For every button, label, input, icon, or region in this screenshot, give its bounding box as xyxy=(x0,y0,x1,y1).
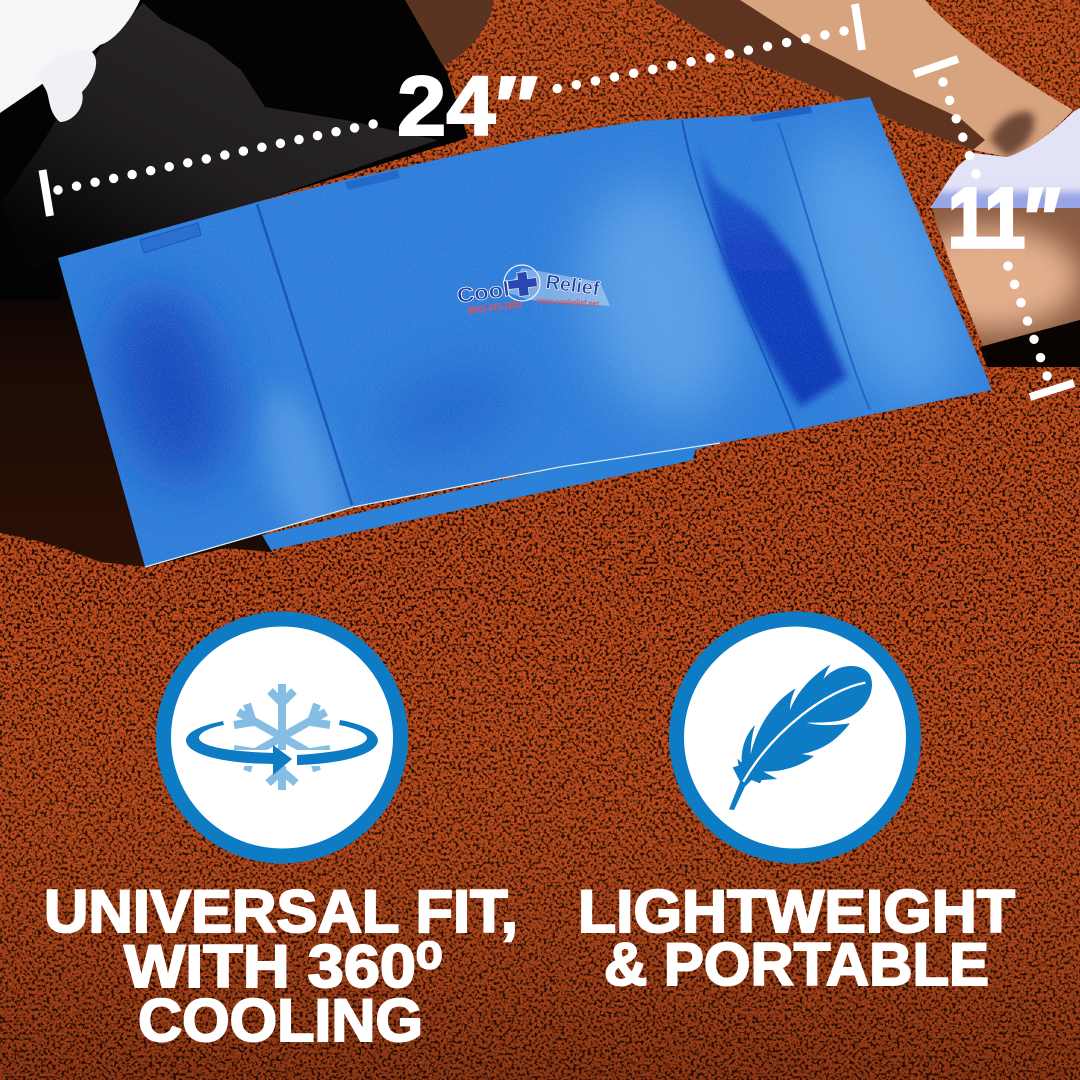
shadow under pack and athlete xyxy=(0,258,146,567)
11 inch bottom dotted line xyxy=(1008,266,1047,376)
pack deep fold shadow, right panel xyxy=(690,133,847,407)
logo swoosh xyxy=(505,268,610,306)
caption: lightweight and portable: LIGHTWEIGHT xyxy=(578,878,1015,945)
pack fabric texture xyxy=(50,90,1000,570)
right leg shaded underside xyxy=(653,0,985,150)
pack light patches xyxy=(243,111,995,561)
caption: universal fit: WITH 360⁰ xyxy=(124,933,442,1000)
logo phone number: (800) 475-1609 xyxy=(467,299,522,317)
pack tab: right xyxy=(750,105,812,122)
icon: rotation ring with arrow xyxy=(186,720,378,775)
shadow sliver between pack and flap xyxy=(150,532,272,566)
athlete lower leg xyxy=(932,208,1080,346)
logo cross xyxy=(507,271,538,298)
11 inch top tick xyxy=(914,59,958,74)
right leg knee hollow shadow xyxy=(990,112,1034,157)
caption: universal fit: COOLING xyxy=(138,987,423,1054)
dimension: 11 inch height xyxy=(914,59,1074,397)
dimension: 24 inch width xyxy=(42,4,862,216)
caption: lightweight and portable xyxy=(578,878,1015,998)
24 inch right dotted line xyxy=(556,31,844,89)
pack seam: right xyxy=(682,120,795,430)
11 inch top dotted line xyxy=(943,82,976,174)
caption: universal fit: UNIVERSAL FIT, xyxy=(44,878,518,945)
icon: feather xyxy=(729,664,872,810)
leg shadow on track xyxy=(980,320,1080,367)
athlete black shorts xyxy=(0,0,468,300)
pack stitched bottom edge xyxy=(145,443,720,567)
caption: lightweight and portable: & PORTABLE xyxy=(604,931,989,998)
11 inch bottom tick xyxy=(1030,383,1074,397)
cold pack lower flap xyxy=(262,443,720,550)
logo web address: www.coolrelief.net xyxy=(536,296,600,308)
logo ring xyxy=(504,265,540,301)
24 inch left tick xyxy=(42,170,50,216)
pack tab: left xyxy=(140,223,201,253)
24 inch left dotted line xyxy=(58,124,374,190)
athlete white sock and shoe xyxy=(930,108,1080,208)
athlete left thigh skin xyxy=(405,0,494,66)
icon: 360 degree cooling badge xyxy=(164,619,400,856)
logo word Cool: Cool xyxy=(455,278,511,308)
pack seam: left xyxy=(257,204,352,505)
pack tab: middle xyxy=(345,170,400,190)
pack seam: far right xyxy=(778,123,870,410)
gap behind rotation ring xyxy=(225,750,339,766)
icon: snowflake xyxy=(234,684,330,790)
blue cold pack xyxy=(50,90,1000,570)
pack logo xyxy=(455,265,610,317)
24 inch right tick xyxy=(855,4,862,50)
athlete white shirt with knot xyxy=(0,0,140,122)
24 inch label: 24″ xyxy=(397,59,538,153)
pack soft shadow, left panel xyxy=(91,274,249,496)
logo word Relief: Relief xyxy=(544,271,601,301)
caption: universal fit xyxy=(44,878,518,1054)
11 inch label: 11″ xyxy=(948,171,1060,265)
athlete right leg xyxy=(653,0,1073,157)
icon: lightweight feather badge xyxy=(676,619,914,856)
pack soft shadow, centre panel xyxy=(384,360,516,460)
